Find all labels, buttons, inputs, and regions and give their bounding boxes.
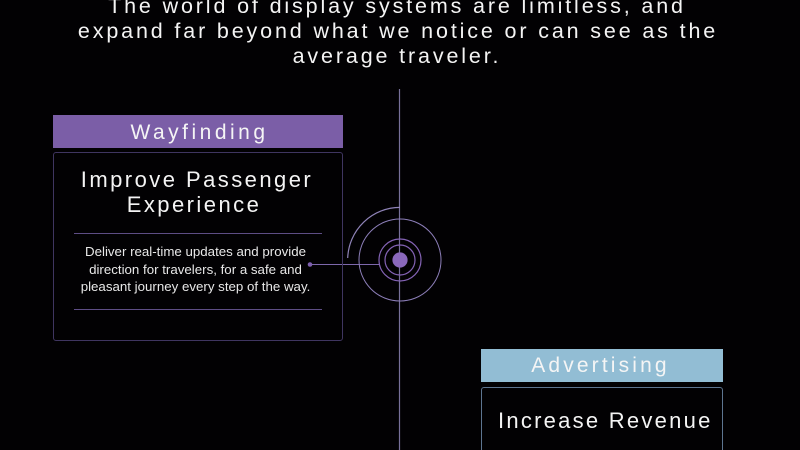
panel: advertising (481, 349, 723, 450)
wayfinding heading band: Wayfinding (130, 121, 269, 144)
card title: Increase Revenue (498, 408, 713, 433)
connector line with dot (308, 262, 379, 267)
card title: Improve Passenger (81, 167, 313, 192)
wayfinding card (53, 152, 343, 341)
vertical timeline line (398, 89, 400, 450)
bottom divider (74, 309, 322, 310)
advertising heading band: Advertising (531, 354, 670, 377)
advertising card (481, 387, 723, 450)
card title (81, 167, 313, 217)
intro text (78, 0, 718, 68)
wayfinding heading band (53, 115, 343, 148)
advertising heading band (481, 349, 723, 382)
intro text: average traveler. (293, 44, 501, 68)
intro text: expand far beyond what we notice or can see as the (78, 19, 718, 43)
card body text (81, 244, 310, 294)
card body text: pleasant journey every step of the way. (81, 279, 310, 294)
top divider (74, 233, 322, 234)
card body text: Deliver real-time updates and provide (85, 244, 306, 259)
card title: Experience (127, 192, 261, 217)
panel: wayfinding (53, 115, 343, 341)
icon: concentric target (348, 207, 441, 301)
card body text: direction for travelers, for a safe and (89, 262, 302, 276)
